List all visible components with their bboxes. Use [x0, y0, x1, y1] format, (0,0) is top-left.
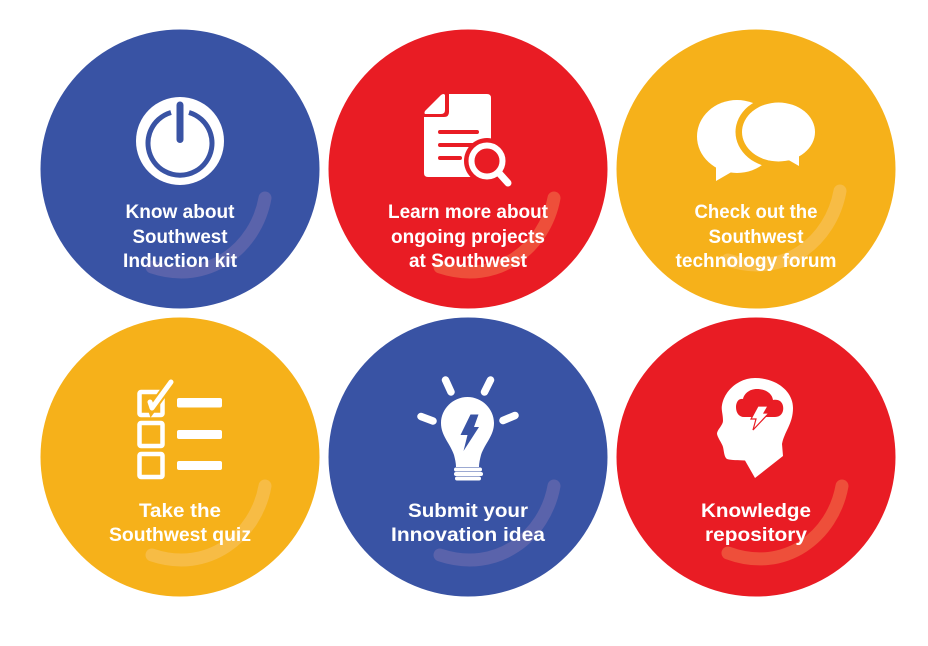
- label: Learn more about ongoing projects at Southwest: [388, 202, 549, 272]
- panel: Submit your Innovation idea: [328, 318, 608, 596]
- label: Know about Southwest Induction kit: Know about: [126, 202, 235, 223]
- label: Submit your Innovation idea: Innovation idea: [391, 525, 545, 546]
- icon: head with storm cloud: [717, 378, 793, 478]
- label: Submit your Innovation idea: [391, 501, 545, 546]
- label: Learn more about ongoing projects at Southwest: at Southwest: [409, 251, 528, 272]
- label: Learn more about ongoing projects at Southwest: Learn more about: [388, 202, 549, 223]
- icon: checklist: [140, 382, 222, 477]
- label: Knowledge repository: [701, 501, 811, 546]
- label: Knowledge repository: repository: [705, 525, 807, 546]
- label: Submit your Innovation idea: Submit your: [408, 501, 529, 522]
- label: Know about Southwest Induction kit: Southwest: [132, 227, 228, 248]
- icon: light bulb: [421, 380, 515, 478]
- label: Know about Southwest Induction kit: Induction kit: [123, 251, 238, 272]
- panel: Check out the Southwest technology forum: [616, 30, 896, 308]
- icon: speech bubbles: [697, 96, 822, 181]
- icon: power button: [136, 97, 224, 185]
- label: Check out the Southwest technology forum: Check out the: [694, 202, 818, 223]
- label: Take the Southwest quiz: [109, 501, 251, 546]
- label: Take the Southwest quiz: Take the: [139, 501, 221, 522]
- panel: Learn more about ongoing projects: [328, 30, 608, 308]
- label: Knowledge repository: Knowledge: [701, 501, 811, 522]
- label: Take the Southwest quiz: Southwest quiz: [109, 525, 251, 546]
- label: Check out the Southwest technology forum: [676, 202, 836, 272]
- panel: Knowledge repository: [616, 318, 896, 596]
- label: Know about Southwest Induction kit: [123, 202, 238, 272]
- panel: Know about Southwest Induction kit: [40, 30, 320, 308]
- icon: document with magnifier: [424, 94, 510, 184]
- label: Check out the Southwest technology forum: Southwest: [708, 227, 804, 248]
- label: Check out the Southwest technology forum: technology forum: [676, 251, 836, 272]
- panel: Take the Southwest quiz: [40, 318, 320, 596]
- label: Learn more about ongoing projects at Southwest: ongoing projects: [391, 227, 545, 248]
